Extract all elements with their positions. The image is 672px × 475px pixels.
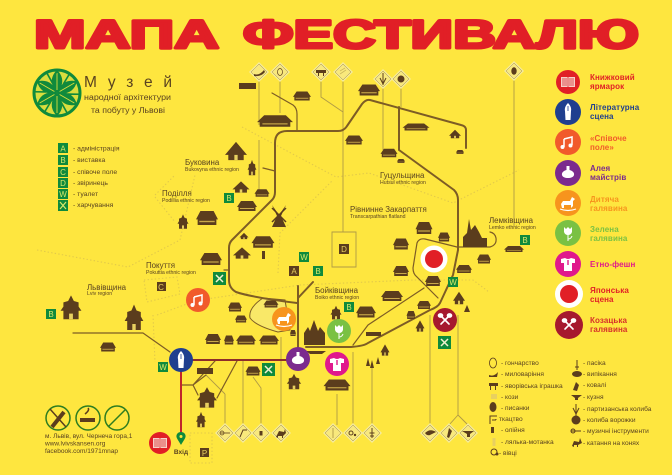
museum name: Музей: [84, 74, 172, 91]
crafts legend: - ковалі: [583, 381, 607, 389]
crafts legend: - миловаріння: [501, 370, 544, 378]
region labels: Бойківщина: [315, 286, 359, 295]
region labels: Лемківщина: [489, 216, 534, 225]
map facility markers: [46, 193, 530, 458]
venue legend: Алея: [590, 164, 611, 173]
map facility markers: A: [291, 267, 297, 276]
address: [44, 432, 133, 455]
map facility markers: B: [226, 194, 232, 203]
regional dotted boundaries: [37, 127, 519, 463]
museum name: та побуту у Львові: [91, 106, 165, 115]
region labels: Podillia ethnic region: [162, 198, 210, 204]
region labels: Гуцульщина: [380, 171, 425, 180]
region labels: Покуття: [146, 261, 175, 270]
venue legend: Етно-фешн: [590, 260, 635, 269]
facility legend: C: [60, 168, 66, 177]
map facility markers: D: [341, 245, 347, 254]
stage: children on map: [272, 307, 296, 331]
title: ФЕСТИВАЛЮ: [243, 13, 639, 57]
map facility markers: W: [449, 278, 457, 287]
crafts legend: - колиба ворожки: [583, 416, 636, 424]
roads: [73, 93, 496, 433]
map facility markers: B: [346, 303, 352, 312]
thin connector lines: [206, 80, 514, 425]
map facility markers: B: [522, 236, 528, 245]
title: МАПА: [34, 13, 219, 57]
venue legend: Козацька: [590, 316, 628, 325]
region labels: Transcarpathian flatland: [350, 214, 406, 220]
stage: ethno fashion on map: [325, 352, 349, 376]
region labels: Lemko ethnic region: [489, 225, 536, 231]
crafts legend icons: [489, 358, 582, 456]
stage: book fair on map: [149, 432, 171, 454]
region labels: Lviv region: [87, 291, 112, 297]
museum logo: [28, 65, 86, 121]
entrance pin: [174, 432, 188, 456]
crafts legend: - яворівська іграшка: [501, 382, 563, 390]
venue legend: галявина: [590, 325, 628, 334]
venue legend: Дитяча: [590, 195, 619, 204]
food markers: [213, 272, 451, 376]
venue legend: сцена: [590, 295, 614, 304]
region labels: [87, 158, 536, 301]
venue legend: галявина: [590, 234, 628, 243]
venue legend: Японська: [590, 286, 629, 295]
museum name: [84, 74, 172, 115]
stage: japanese on map: [420, 246, 448, 272]
venue legend: майстрів: [590, 173, 626, 182]
houses and buildings: [61, 83, 524, 427]
map facility markers: W: [159, 363, 167, 372]
region labels: Львівщина: [87, 283, 127, 292]
entrance pin: Вхід: [174, 448, 188, 456]
venue legend: ярмарок: [590, 82, 625, 91]
address: www.lvivskansen.org: [44, 440, 106, 448]
crafts legend: - гончарство: [501, 360, 539, 367]
horse meadow: [250, 298, 290, 332]
facility legend: - звіринець: [73, 179, 108, 187]
map facility markers: B: [315, 267, 321, 276]
prohibition signs: [46, 406, 129, 430]
crafts legend: [495, 359, 652, 457]
address: м. Львів, вул. Чернеча гора,1: [45, 432, 133, 440]
region labels: Boiko ethnic region: [315, 295, 359, 301]
address: facebook.com/1971mnap: [45, 448, 118, 455]
venue legend: галявина: [590, 204, 628, 213]
stage: literary on map: [169, 348, 193, 372]
map facility markers: P: [202, 449, 207, 458]
venue legend: Книжковий: [590, 73, 635, 82]
map facility markers: B: [48, 310, 54, 319]
map facility markers: W: [300, 253, 308, 262]
stage: masters alley on map: [286, 347, 310, 371]
region labels: Буковина: [185, 158, 220, 167]
facility legend: [58, 143, 120, 211]
region labels: Hutsul ethnic region: [380, 180, 426, 186]
title: [34, 13, 639, 57]
facility legend: A: [60, 144, 66, 154]
region labels: Bukovyna ethnic region: [185, 167, 239, 173]
venue legend: [555, 70, 640, 339]
region labels: Pokuttia ethnic region: [146, 270, 196, 276]
venue legend: поле»: [590, 143, 614, 152]
facility legend: W: [59, 190, 67, 199]
museum name: народної архітектури: [84, 93, 171, 102]
crafts legend: - лялька-мотанка: [501, 439, 554, 446]
crafts legend: - випікання: [583, 370, 617, 378]
region labels: Поділля: [162, 189, 192, 198]
crafts legend: - кози: [501, 394, 519, 401]
crafts legend: - олійня: [501, 426, 525, 434]
facility legend: - адміністрація: [73, 144, 120, 152]
stage: singing field on map: [186, 288, 210, 312]
stage: cossack on map: [433, 308, 457, 332]
venue legend: Зелена: [590, 225, 619, 234]
crafts legend: - партизанська колиба: [583, 405, 652, 413]
map facility markers: C: [158, 283, 164, 292]
crafts legend: - кузня: [583, 394, 604, 401]
stage: green meadow on map: [327, 319, 351, 343]
crafts legend: - ткацтво: [495, 416, 523, 423]
crafts legend: - музичні інструменти: [583, 427, 649, 435]
facility legend: - харчування: [73, 202, 114, 209]
facility legend: D: [60, 179, 66, 188]
crafts legend: - пасіка: [583, 359, 606, 367]
venue legend: сцена: [590, 112, 614, 121]
facility legend: - туалет: [73, 191, 98, 198]
crafts legend: - вівці: [499, 449, 517, 457]
venue legend: «Співоче: [590, 134, 627, 143]
crafts legend: - катання на конях: [583, 440, 640, 447]
facility legend: B: [60, 156, 66, 165]
activity diamonds: [216, 62, 522, 442]
facility legend: - співоче поле: [73, 168, 117, 176]
facility legend: - виставка: [73, 157, 106, 164]
venue legend: Літературна: [590, 103, 640, 112]
crafts legend: - писанки: [501, 405, 530, 412]
region labels: Рівнинне Закарпаття: [350, 205, 427, 214]
